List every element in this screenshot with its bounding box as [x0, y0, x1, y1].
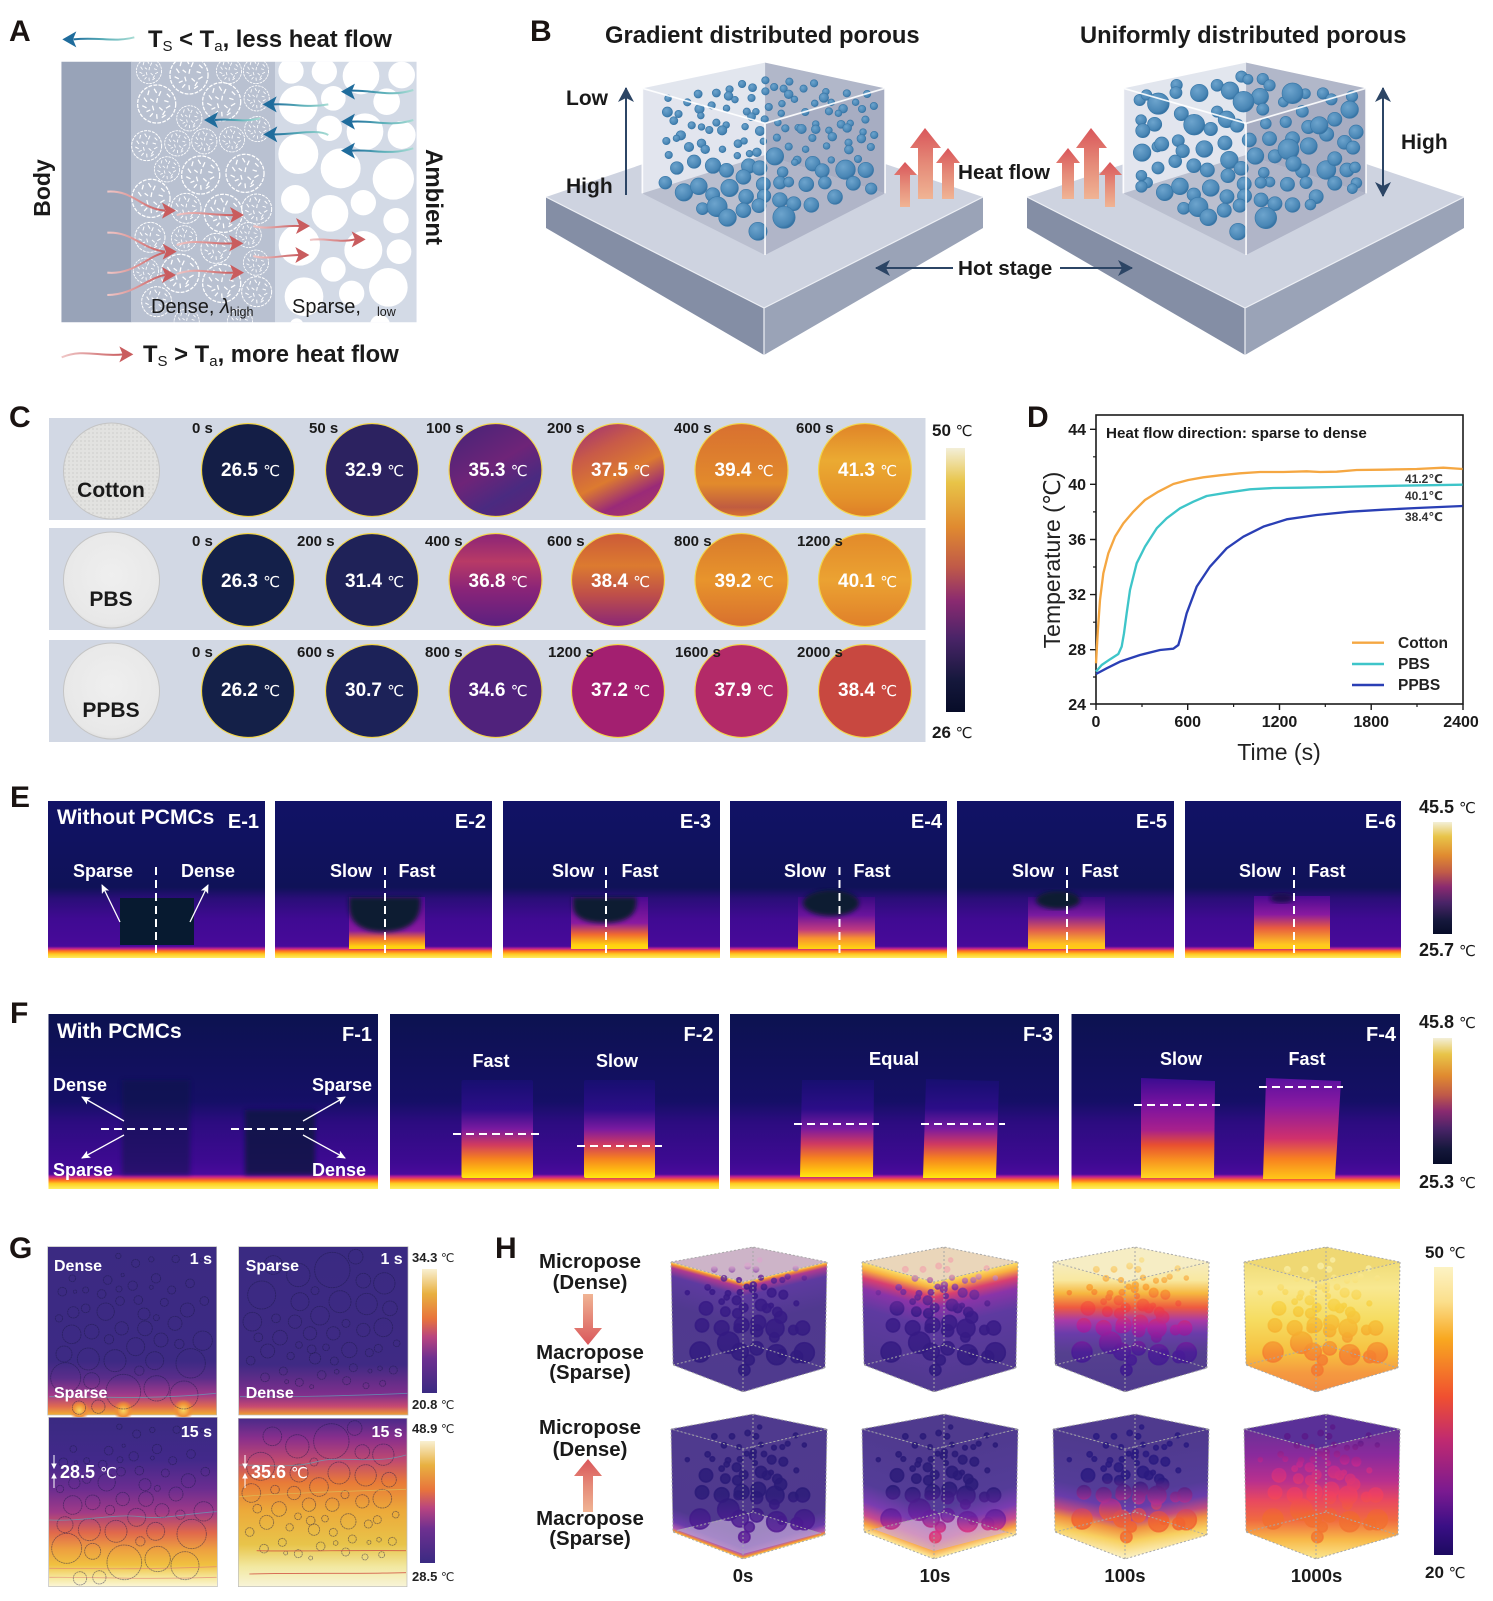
colour bar E min: 25.7 ℃	[1419, 940, 1476, 960]
E-4 frame: Slow	[784, 861, 827, 881]
row: PPBS: 0 s	[192, 644, 213, 661]
legend: more heat flow: > T	[168, 341, 210, 368]
arrow: uniform double headed	[1382, 88, 1384, 196]
label: sparse, low: Sparse,	[292, 296, 361, 318]
arrow: gradient direction	[625, 88, 627, 195]
E-3 frame	[503, 801, 720, 958]
y axis labels	[1068, 422, 1086, 714]
row: cotton: 37.5 ℃	[591, 460, 650, 481]
row labels: (Dense)	[553, 1439, 627, 1461]
F-4 frame: Slow	[1160, 1049, 1203, 1069]
y axis labels: 24	[1068, 697, 1086, 714]
heat flow arrows right	[1056, 128, 1122, 207]
E-2 frame: E-2	[455, 811, 486, 833]
label: Low: Low	[566, 87, 609, 110]
row: PBS	[49, 528, 926, 630]
plot frame and ticks	[1090, 415, 1463, 710]
F-1 frame: Dense	[312, 1160, 366, 1180]
colour bar G bottom	[420, 1441, 435, 1563]
E-2 frame: Fast	[398, 861, 436, 881]
time labels: 0s	[733, 1565, 753, 1586]
row labels: (Sparse)	[549, 1362, 631, 1384]
E-2 frame	[275, 801, 492, 958]
time labels: 10s	[920, 1565, 950, 1586]
colour bar G labels: 20.8 ℃	[412, 1397, 454, 1412]
F-3 frame	[730, 1014, 1059, 1189]
F-1 frame: With PCMCs	[57, 1020, 182, 1043]
panel H: simulated 3D cubes	[536, 1243, 1466, 1586]
red arrow heads	[119, 203, 366, 362]
row: cotton: 41.3 ℃	[838, 460, 897, 481]
F-4 frame	[1072, 1014, 1400, 1189]
label: Dense G1: Dense	[54, 1258, 102, 1275]
x axis labels: 2400	[1443, 714, 1479, 731]
row labels: Macropose	[536, 1342, 644, 1364]
row: PBS: 1200 s	[797, 533, 843, 550]
colour bar G top	[422, 1269, 437, 1393]
x axis labels	[1092, 714, 1479, 731]
E-6 frame: E-6	[1365, 811, 1396, 833]
E-3 frame: Fast	[621, 861, 659, 881]
row: PPBS: 1200 s	[548, 644, 594, 661]
y axis labels: 44	[1068, 422, 1086, 439]
F-1 frame: Dense	[53, 1075, 107, 1095]
row: PPBS: 1600 s	[675, 644, 721, 661]
panel label A: A	[9, 15, 31, 48]
panel E: without PCMCs	[48, 797, 1476, 960]
heading: gradient distributed porous: Gradient distributed porous	[605, 22, 920, 49]
legend: PBS	[1398, 656, 1430, 673]
colour bar F	[1433, 1038, 1452, 1164]
heat flow arrows left	[894, 128, 960, 207]
E-6 frame: Slow	[1239, 861, 1282, 881]
end value labels: 41.2℃	[1405, 472, 1443, 486]
curves	[1096, 468, 1463, 674]
F-2 frame: F-2	[684, 1024, 714, 1046]
E-2 frame: Slow	[330, 861, 373, 881]
F-1 frame: Sparse	[53, 1160, 113, 1180]
legend: less heat flow: < T	[173, 26, 215, 53]
colour bar C	[946, 448, 965, 712]
legend: more heat flow: , more heat flow	[218, 341, 399, 368]
panel label B: B	[530, 15, 552, 48]
row: PPBS	[49, 640, 926, 742]
row: PBS: 600 s	[547, 533, 585, 550]
row: PPBS: PPBS	[82, 699, 140, 722]
colour bar E max: 45.5 ℃	[1419, 797, 1476, 817]
label: Body: Body	[29, 159, 55, 217]
E-4 frame: Fast	[853, 861, 891, 881]
x axis labels: 1800	[1353, 714, 1389, 731]
time G2: 1 s	[380, 1251, 403, 1268]
label: Sparse G2: Sparse	[246, 1258, 299, 1275]
panel F: with PCMCs	[48, 1012, 1476, 1192]
legend: less heat flow: T	[148, 26, 163, 53]
row: PPBS: 30.7 ℃	[345, 680, 404, 701]
row: PPBS: 34.6 ℃	[468, 680, 528, 701]
row: cotton: 35.3 ℃	[468, 460, 528, 481]
label: Sparse G1: Sparse	[54, 1385, 107, 1402]
F-2 frame: Fast	[472, 1051, 510, 1071]
value G4: 35.6 ℃	[251, 1462, 308, 1482]
label: heat flow: Heat flow	[958, 161, 1051, 184]
F-1 frame: Sparse	[312, 1075, 372, 1095]
panel B: porous structures on hot stages	[546, 22, 1464, 355]
row labels: (Dense)	[553, 1272, 627, 1294]
panel D: temperature vs time chart	[1039, 415, 1479, 765]
row: PBS: 0 s	[192, 533, 213, 550]
row: cotton: 32.9 ℃	[345, 460, 404, 481]
chart note: Heat flow direction: sparse to dense	[1106, 425, 1367, 442]
cube row 1, 100 s	[1053, 1247, 1209, 1392]
colour bar F max: 45.8 ℃	[1419, 1012, 1476, 1032]
colour bar min label: 26 ℃	[932, 723, 972, 742]
colour bar G labels: 28.5 ℃	[412, 1569, 454, 1584]
row: PPBS: 37.9 ℃	[714, 680, 774, 701]
row: PBS: 200 s	[297, 533, 335, 550]
row: PPBS: 2000 s	[797, 644, 843, 661]
row labels: (Sparse)	[549, 1528, 631, 1550]
row: cotton: 50 s	[309, 420, 338, 437]
F-4 frame: F-4	[1366, 1024, 1397, 1046]
row: PPBS: 26.2 ℃	[221, 680, 280, 701]
row labels: Micropose	[539, 1417, 641, 1439]
gradient cube	[642, 63, 885, 255]
legend	[1352, 635, 1448, 694]
y axis labels: 32	[1068, 587, 1086, 604]
F-1 frame	[48, 1014, 378, 1189]
label: High right: High	[1401, 131, 1448, 154]
legend: less heat flow: S	[163, 38, 173, 55]
cube row 1, 1000 s	[1244, 1247, 1400, 1392]
F-3 frame: Equal	[869, 1048, 919, 1069]
legend: more heat flow: T	[143, 341, 158, 368]
end value labels	[1405, 472, 1443, 524]
row: cotton	[49, 418, 926, 520]
gap arrows G3 and G4	[52, 1455, 247, 1488]
E-5 frame: Slow	[1012, 861, 1055, 881]
hot stage right	[1027, 123, 1464, 355]
legend: less heat flow: a	[214, 38, 223, 55]
F-3 frame: F-3	[1023, 1024, 1053, 1046]
panel label D: D	[1027, 401, 1049, 434]
label: Ambient: Ambient	[420, 149, 447, 245]
legend: less heat flow: , less heat flow	[223, 26, 392, 53]
blue arrow heads	[62, 31, 355, 159]
panel A: heat flow schematic	[29, 26, 447, 370]
time G3: 15 s	[181, 1424, 212, 1441]
F-4 frame: Fast	[1288, 1049, 1326, 1069]
cube row 2, 100 s	[1053, 1414, 1209, 1559]
F-2 frame: Slow	[596, 1051, 639, 1071]
row labels: Macropose	[536, 1508, 644, 1530]
label: High left: High	[566, 175, 613, 198]
label: low subscript: low	[377, 305, 397, 319]
E-6 frame	[1185, 801, 1401, 958]
row: PBS: 38.4 ℃	[591, 571, 650, 592]
colour bar G labels: 48.9 ℃	[412, 1421, 454, 1436]
arrow: heat flow up	[574, 1459, 602, 1512]
panel label F: F	[10, 997, 28, 1030]
row: PPBS: 38.4 ℃	[838, 680, 897, 701]
colour bar H max: 50 ℃	[1425, 1243, 1466, 1262]
row: PPBS: 800 s	[425, 644, 463, 661]
y axis labels: 28	[1068, 642, 1086, 659]
colour bar max label: 50 ℃	[932, 421, 972, 440]
row: PBS: 26.3 ℃	[221, 571, 280, 592]
cube row 2, 0 s	[671, 1414, 827, 1559]
red heat arrows	[62, 192, 355, 357]
panel G: simulated temperature fields	[48, 1247, 454, 1587]
row labels: Micropose	[539, 1251, 641, 1273]
legend: more heat flow: a	[209, 353, 218, 370]
panel label G: G	[9, 1232, 32, 1265]
simulation frames	[48, 1247, 408, 1587]
arrow: hot stage right pointer	[1060, 267, 1132, 269]
E-5 frame	[957, 801, 1174, 958]
row: cotton: 200 s	[547, 420, 585, 437]
panel label E: E	[10, 781, 30, 814]
row: PBS: 31.4 ℃	[345, 571, 404, 592]
E-4 frame: E-4	[911, 811, 943, 833]
row: PBS: PBS	[89, 588, 133, 611]
E-1 frame: Without PCMCs	[57, 806, 214, 829]
row: cotton: 39.4 ℃	[714, 460, 774, 481]
row: PBS: 39.2 ℃	[714, 571, 774, 592]
label: Dense G2: Dense	[246, 1385, 294, 1402]
E-4 frame	[730, 801, 947, 958]
heading: uniformly distributed porous: Uniformly distributed porous	[1080, 23, 1406, 49]
arrow: heat flow down	[574, 1294, 602, 1345]
E-5 frame: Fast	[1081, 861, 1119, 881]
E-5 frame: E-5	[1136, 811, 1167, 833]
end value labels: 40.1℃	[1405, 489, 1443, 503]
cube row 1, 0 s	[671, 1247, 827, 1392]
time labels: 1000s	[1291, 1565, 1342, 1586]
panel C: thermal images of samples	[49, 418, 972, 742]
x axis labels: 0	[1092, 714, 1101, 731]
colour bar G labels	[412, 1250, 454, 1584]
colour bar H	[1434, 1267, 1453, 1555]
F-1 frame: F-1	[342, 1024, 372, 1046]
colour bar H min: 20 ℃	[1425, 1563, 1466, 1582]
y axis labels: 40	[1068, 477, 1086, 494]
row: PBS: 36.8 ℃	[468, 571, 528, 592]
time G4: 15 s	[372, 1424, 403, 1441]
row: cotton: 400 s	[674, 420, 712, 437]
x axis labels: 600	[1174, 714, 1201, 731]
E-1 frame: Dense	[181, 861, 235, 881]
row: PPBS: 37.2 ℃	[591, 680, 650, 701]
time G1: 1 s	[190, 1251, 212, 1268]
row: PBS: 40.1 ℃	[838, 571, 897, 592]
uniform cube	[1123, 63, 1366, 255]
legend: Cotton	[1398, 635, 1448, 652]
time labels: 100s	[1104, 1565, 1146, 1586]
blue heat arrows	[73, 37, 413, 152]
row labels	[536, 1251, 644, 1550]
panel label C: C	[9, 401, 31, 434]
time labels	[733, 1565, 1342, 1586]
E-3 frame: E-3	[680, 811, 711, 833]
label: dense, lambda high: high	[230, 305, 253, 319]
row: cotton: 0 s	[192, 420, 213, 437]
y axis labels: 36	[1068, 532, 1086, 549]
colour bar G labels: 34.3 ℃	[412, 1250, 454, 1265]
E-6 frame: Fast	[1308, 861, 1346, 881]
row: PPBS: 600 s	[297, 644, 335, 661]
hot stage left	[546, 123, 983, 355]
row: cotton: Cotton	[77, 479, 145, 502]
legend: PPBS	[1398, 677, 1440, 694]
row: PBS: 400 s	[425, 533, 463, 550]
label: hot stage: Hot stage	[958, 257, 1052, 280]
legend: more heat flow: S	[158, 353, 168, 370]
row: cotton: 600 s	[796, 420, 834, 437]
label: dense, lambda high: Dense, λ	[151, 296, 230, 318]
arrow: hot stage left pointer	[876, 267, 953, 269]
cube row 2, 1000 s	[1244, 1414, 1400, 1559]
cube row 2, 10 s	[862, 1414, 1018, 1559]
x axis labels: 1200	[1262, 714, 1297, 731]
end value labels: 38.4℃	[1405, 510, 1443, 524]
E-1 frame	[48, 801, 265, 958]
x axis title: Time (s)	[1237, 739, 1321, 765]
row: PBS: 800 s	[674, 533, 712, 550]
cube row 1, 10 s	[862, 1247, 1018, 1392]
colour bar E	[1433, 822, 1452, 934]
row: cotton: 26.5 ℃	[221, 460, 280, 481]
colour bar F min: 25.3 ℃	[1419, 1172, 1476, 1192]
value G3: 28.5 ℃	[60, 1462, 117, 1482]
diagram layers and pores	[61, 31, 417, 362]
F-2 frame	[390, 1014, 719, 1189]
E-1 frame: Sparse	[73, 861, 133, 881]
E-1 frame: E-1	[228, 811, 259, 833]
y axis title: Temperature (℃)	[1039, 472, 1065, 648]
E-3 frame: Slow	[552, 861, 595, 881]
panel label H: H	[495, 1232, 517, 1265]
row: cotton: 100 s	[426, 420, 464, 437]
